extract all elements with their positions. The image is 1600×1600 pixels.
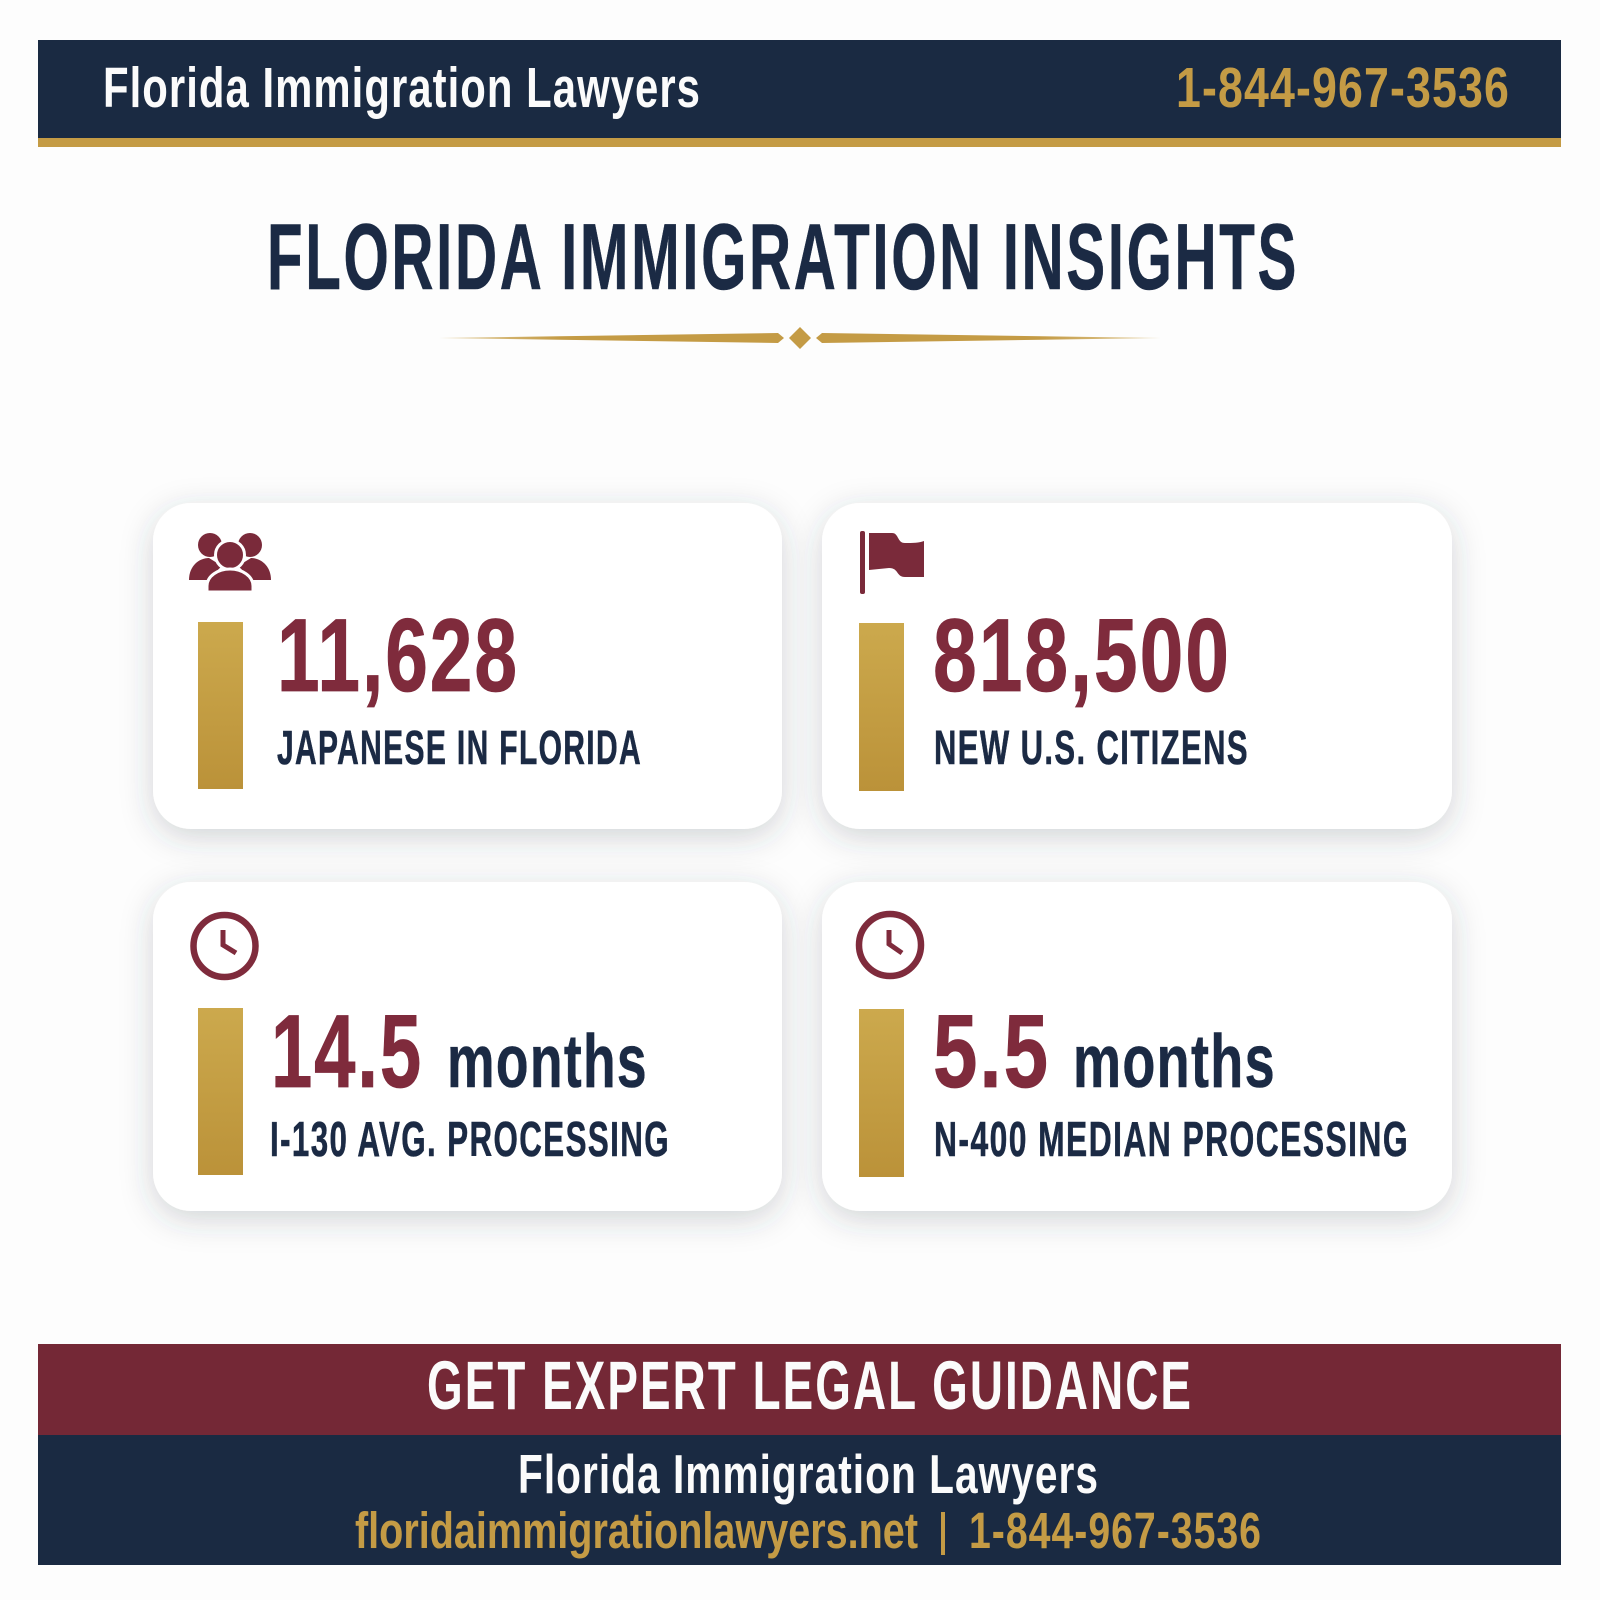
footer website: floridaimmigrationlawyers.net: [355, 1502, 918, 1559]
panel: I-130 processing: [153, 882, 782, 1211]
label: I-130 average processing: I-130 AVG. PROCESSING: [270, 1113, 670, 1167]
icon: clock: [859, 914, 921, 976]
gold accent bar: [859, 1009, 904, 1177]
header firm name: Florida Immigration Lawyers: [103, 56, 701, 120]
statistic: 14.5: 14.5: [271, 994, 423, 1110]
icon: clock: [194, 915, 256, 977]
header phone number: 1-844-967-3536: [1176, 56, 1510, 120]
gold accent bar: [198, 622, 243, 789]
footer separator: [941, 1512, 945, 1555]
label: Japanese in Florida: JAPANESE IN FLORIDA: [277, 722, 642, 775]
unit: months: months: [447, 1019, 648, 1103]
footer firm name: Florida Immigration Lawyers: [518, 1443, 1099, 1505]
gold accent bar: [859, 623, 904, 791]
statistic: 818,500: 818,500: [933, 598, 1231, 714]
panel: new U.S. citizens: [822, 503, 1452, 829]
statistic: 5.5: 5.5: [933, 994, 1050, 1110]
header band: [38, 40, 1561, 147]
panel: N-400 processing: [822, 882, 1452, 1211]
title divider with diamond: [439, 327, 1161, 349]
call to action heading: GET EXPERT LEGAL GUIDANCE: [427, 1347, 1193, 1424]
panel: Japanese in Florida: [153, 503, 782, 829]
icon: group of people: [189, 533, 271, 592]
footer call to action band: [38, 1344, 1561, 1435]
statistic: 11,628: 11,628: [277, 598, 519, 714]
footer contact band: [38, 1435, 1561, 1565]
label: new U.S. citizens: NEW U.S. CITIZENS: [934, 722, 1249, 775]
footer phone number: 1-844-967-3536: [969, 1502, 1262, 1559]
gold accent bar: [198, 1008, 243, 1175]
icon: flag: [860, 531, 924, 594]
unit: months: months: [1073, 1019, 1276, 1103]
